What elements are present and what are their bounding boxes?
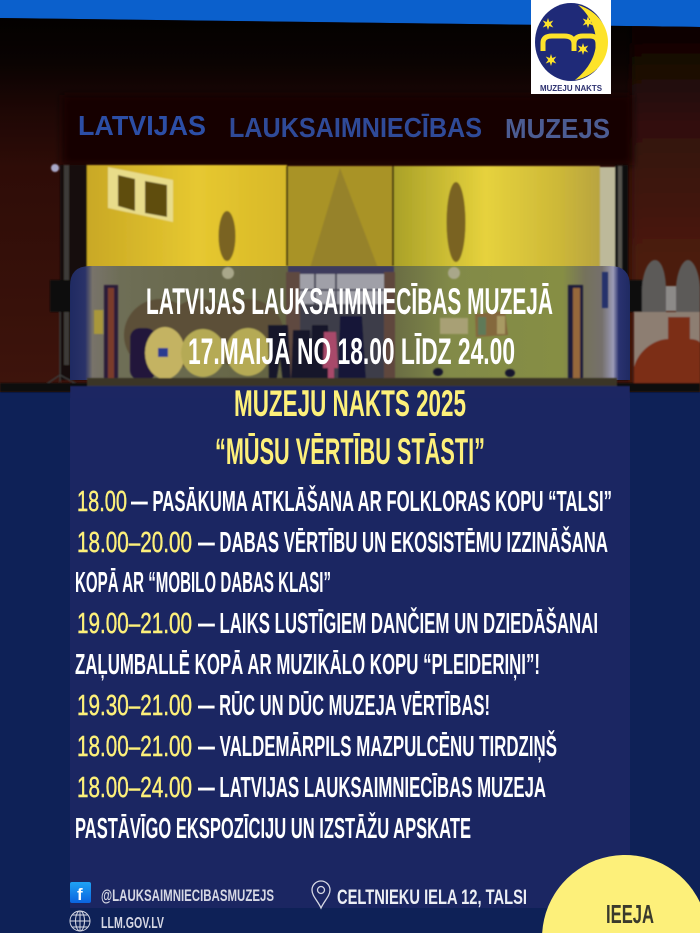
item: engines: — RŪC UN DŪC MUZEJA VĒRTĪBAS! [198, 690, 490, 722]
programme list [75, 485, 612, 845]
icon: facebook [70, 882, 91, 904]
icon: location pin [312, 881, 330, 908]
item: opening: 18.00 [77, 486, 127, 518]
panel: programme [70, 266, 630, 908]
icon: globe [70, 911, 90, 931]
item: exhibitions [75, 772, 546, 845]
building sign text [78, 110, 610, 144]
building sign text: LATVIJAS [78, 110, 206, 141]
item: nature values: 18.00–20.00 [77, 527, 192, 559]
facebook handle: @LAUKSAIMNIECIBASMUZEJS [101, 886, 274, 905]
item: nature values: KOPĀ AR “MOBILO DABAS KLASI” [75, 567, 331, 599]
item: market [77, 730, 557, 763]
item: nature values [75, 526, 608, 599]
heading: theme: “MŪSU VĒRTĪBU STĀSTI” [215, 431, 485, 472]
photo: museum building at night [0, 0, 700, 392]
logo: Muzeju Nakts [531, 0, 611, 94]
item: market: 18.00–21.00 [77, 731, 192, 763]
heading: event name: MUZEJU NAKTS 2025 [234, 383, 466, 424]
logo: Muzeju Nakts: MUZEJU NAKTS [540, 83, 602, 93]
item: dancing: 19.00–21.00 [77, 608, 192, 640]
icon: facebook: f [77, 885, 83, 904]
building sign text: LAUKSAIMNIECĪBAS [229, 112, 482, 143]
item: engines [77, 690, 490, 722]
item: dancing [75, 607, 598, 681]
website: LLM.GOV.LV [101, 915, 164, 932]
badge: entrance: IEEJA [606, 899, 654, 929]
address: CELTNIEKU IELA 12, TALSI [337, 885, 527, 909]
building sign text: MUZEJS [505, 113, 610, 144]
item: engines: 19.30–21.00 [77, 690, 192, 722]
item: exhibitions: 18.00–24.00 [77, 772, 192, 804]
badge: entrance [542, 855, 700, 933]
